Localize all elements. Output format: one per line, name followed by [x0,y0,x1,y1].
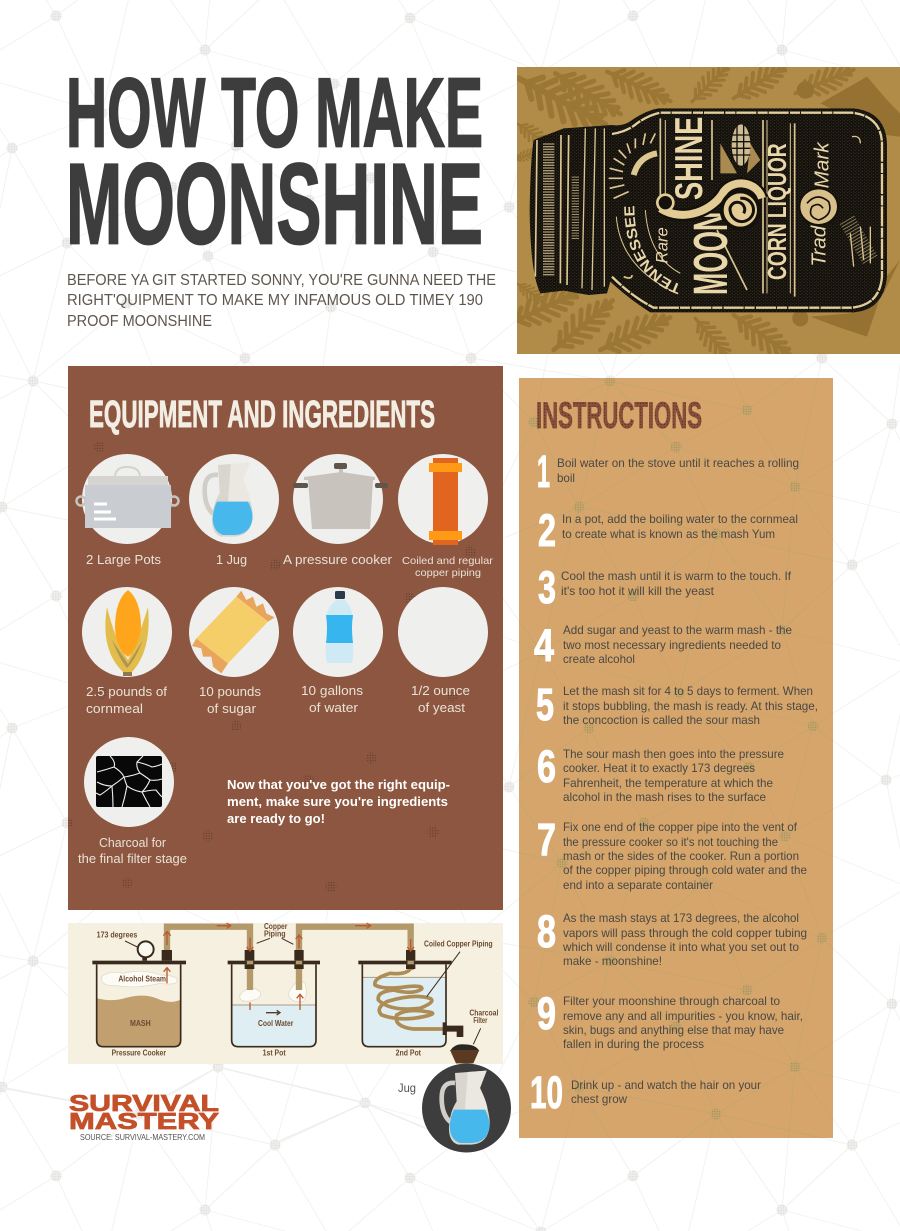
labels: ingredients: cornmeal [86,701,143,716]
step 10: chest grow [571,1092,627,1106]
step 1: 1 [537,446,550,497]
diagram labels: Copper [264,922,287,931]
step 6: The sour mash then goes into the pressure [563,747,784,761]
labels: ingredients: 2.5 pounds of [86,684,167,699]
step 7: 7 [537,814,556,865]
second pot vessel [358,961,452,1047]
step 9: remove any and all impurities - you know, hair, [563,1009,803,1023]
step 6: alcohol in the mash rises to the surface [563,790,766,804]
callout: right equipment: are ready to go! [227,811,325,826]
callout: right equipment [227,777,450,826]
first pot vessel [228,961,320,1047]
step 5: 5 [536,679,554,730]
step 5: the concoction is called the sour mash [563,713,760,727]
step 4 [534,620,792,671]
diagram labels: Alcohol Steam [118,975,166,984]
step 6: cooker. Heat it to exactly 173 degrees [563,761,755,775]
step 8: As the mash stays at 173 degrees, the alcohol [563,911,799,925]
label: charcoal: the final filter stage [78,851,187,866]
step 3: it's too hot it will kill the yeast [561,584,715,598]
step 9: 9 [537,988,556,1039]
heading: instructions: INSTRUCTIONS [536,395,702,436]
leader lines [125,938,481,1044]
labels: equipment [86,552,494,579]
intro text: BEFORE YA GIT STARTED SONNY, YOU'RE GUNNA NEED THE [67,272,496,289]
step 6: Fahrenheit, the temperature at which the [563,776,773,790]
step 2 [538,505,798,556]
diagram labels: MASH [130,1019,151,1028]
step 7: mash or the sides of the cooker. Run a portion [563,849,799,863]
diagram labels: Charcoal [469,1008,498,1017]
step 8: make - moonshine! [563,954,662,968]
labels: equipment: 2 Large Pots [86,552,162,567]
labels: equipment: Coiled and regular [402,555,494,567]
moonshine jar illustration: Trade [807,214,830,267]
icon: yeast blank circle [398,587,488,677]
diagram labels: Filter [473,1016,487,1025]
moonshine jar illustration: TENNESSEE [624,206,678,294]
title: HOW TO MAKE [66,58,483,168]
icon: large pots [76,454,178,544]
diagram labels: 1st Pot [263,1049,286,1058]
step 7: end into a separate container [563,878,713,892]
copper piping [167,927,411,990]
step 1 [537,446,799,497]
diagram labels: Cool Water [258,1019,293,1028]
heading: equipment and ingredients: EQUIPMENT AND INGREDIENTS [89,394,435,436]
jug icon and label [398,1064,511,1152]
survival mastery logo: SURVIVAL [69,1090,219,1116]
jug icon and label: Jug [398,1081,416,1095]
step 8: vapors will pass through the cold copper tubing [563,926,807,940]
step 4: Add sugar and yeast to the warm mash - the [563,623,792,637]
diagram labels: Pressure Cooker [112,1049,166,1058]
icon: jug [189,454,279,544]
diagram labels: 173 degrees [97,931,138,940]
step 1: Boil water on the stove until it reaches a rolling [557,456,799,470]
icon: water bottle [293,587,383,677]
labels: ingredients: 1/2 ounce [411,683,470,698]
labels: equipment: 1 Jug [216,552,247,567]
intro text: RIGHT'QUIPMENT TO MAKE MY INFAMOUS OLD TIMEY 190 [67,292,483,309]
process diagram [68,922,503,1064]
moonshine jar illustration: CORN LIQUOR [762,143,792,280]
step 3 [538,562,792,613]
moonshine jar illustration: Mark [811,141,834,188]
step 10: Drink up - and watch the hair on your [571,1078,761,1092]
step 5: Let the mash sit for 4 to 5 days to ferment. When [563,684,813,698]
diagram labels [97,922,498,1058]
moonshine jar illustration [517,67,900,354]
step 2: to create what is known as the mash Yum [562,527,775,541]
labels: equipment: copper piping [415,567,481,579]
step 1: boil [557,471,575,485]
labels: ingredients [86,683,470,716]
labels: ingredients: of water [309,700,359,715]
label: charcoal [78,835,187,866]
step 8: 8 [537,906,556,957]
step 7: of the copper piping through cold water and the [563,863,807,877]
icon: pressure cooker [293,454,388,544]
diagram labels: Coiled Copper Piping [424,939,493,948]
label: charcoal: Charcoal for [99,835,167,850]
labels: ingredients: 10 gallons [301,683,364,698]
title [66,58,483,268]
icon: sugar bag [189,587,279,677]
step 7: Fix one end of the copper pipe into the vent of [563,820,798,834]
step 10 [530,1067,761,1118]
step 9: Filter your moonshine through charcoal to [563,994,780,1008]
step 4: create alcohol [563,652,635,666]
moonshine jar illustration: Rare [653,227,672,263]
step 5: it stops bubbling, the mash is ready. At this stage, [563,699,818,713]
labels: ingredients: of sugar [207,701,257,716]
icon: copper piping [398,454,488,545]
callout: right equipment: Now that you've got the right equip- [227,777,450,792]
step 5 [536,679,818,730]
callout: right equipment: ment, make sure you're ingredients [227,794,448,809]
title: MOONSHINE [66,140,483,268]
icon: charcoal [84,737,174,827]
step 8: which will condense it into what you set out to [562,940,799,954]
step 10: 10 [530,1067,563,1118]
coiled copper piping [375,968,443,1029]
diagram labels: Piping [264,930,286,939]
survival mastery logo: SOURCE: SURVIVAL-MASTERY.COM [80,1132,205,1142]
step 3: Cool the mash until it is warm to the touch. If [561,569,792,583]
step 9: skin, bugs and anything else that may have [563,1023,784,1037]
step 2: In a pot, add the boiling water to the cornmeal [562,512,798,526]
labels: ingredients: of yeast [418,700,465,715]
valves and gauge [137,940,463,1037]
intro text: PROOF MOONSHINE [67,313,212,330]
step 7 [537,814,807,892]
charcoal filter bowl [450,1044,479,1063]
step 7: the pressure cooker so it's not touching the [563,835,778,849]
icon: corn [82,587,172,677]
pressure cooker vessel [92,961,186,1047]
step 6: 6 [537,741,556,792]
intro text [67,272,496,330]
panel: instructions [519,378,833,1138]
moonshine jar illustration: MOON [684,212,738,295]
step 6 [537,741,784,804]
step 9 [537,988,803,1051]
labels: equipment: A pressure cooker [283,552,393,567]
step 2: 2 [538,505,556,556]
diagram labels: 2nd Pot [396,1049,421,1058]
panel: equipment and ingredients [68,366,503,910]
step 9: fallen in during the process [563,1037,704,1051]
survival mastery logo: MASTERY [69,1108,219,1134]
step 4: two most necessary ingredients needed to [563,638,781,652]
moonshine jar illustration: SHINE [667,117,711,200]
step 3: 3 [538,562,556,613]
step 4: 4 [534,620,554,671]
flow arrows [163,923,414,1015]
labels: ingredients: 10 pounds [199,684,261,699]
step 8 [537,906,807,968]
survival mastery logo [69,1090,219,1142]
